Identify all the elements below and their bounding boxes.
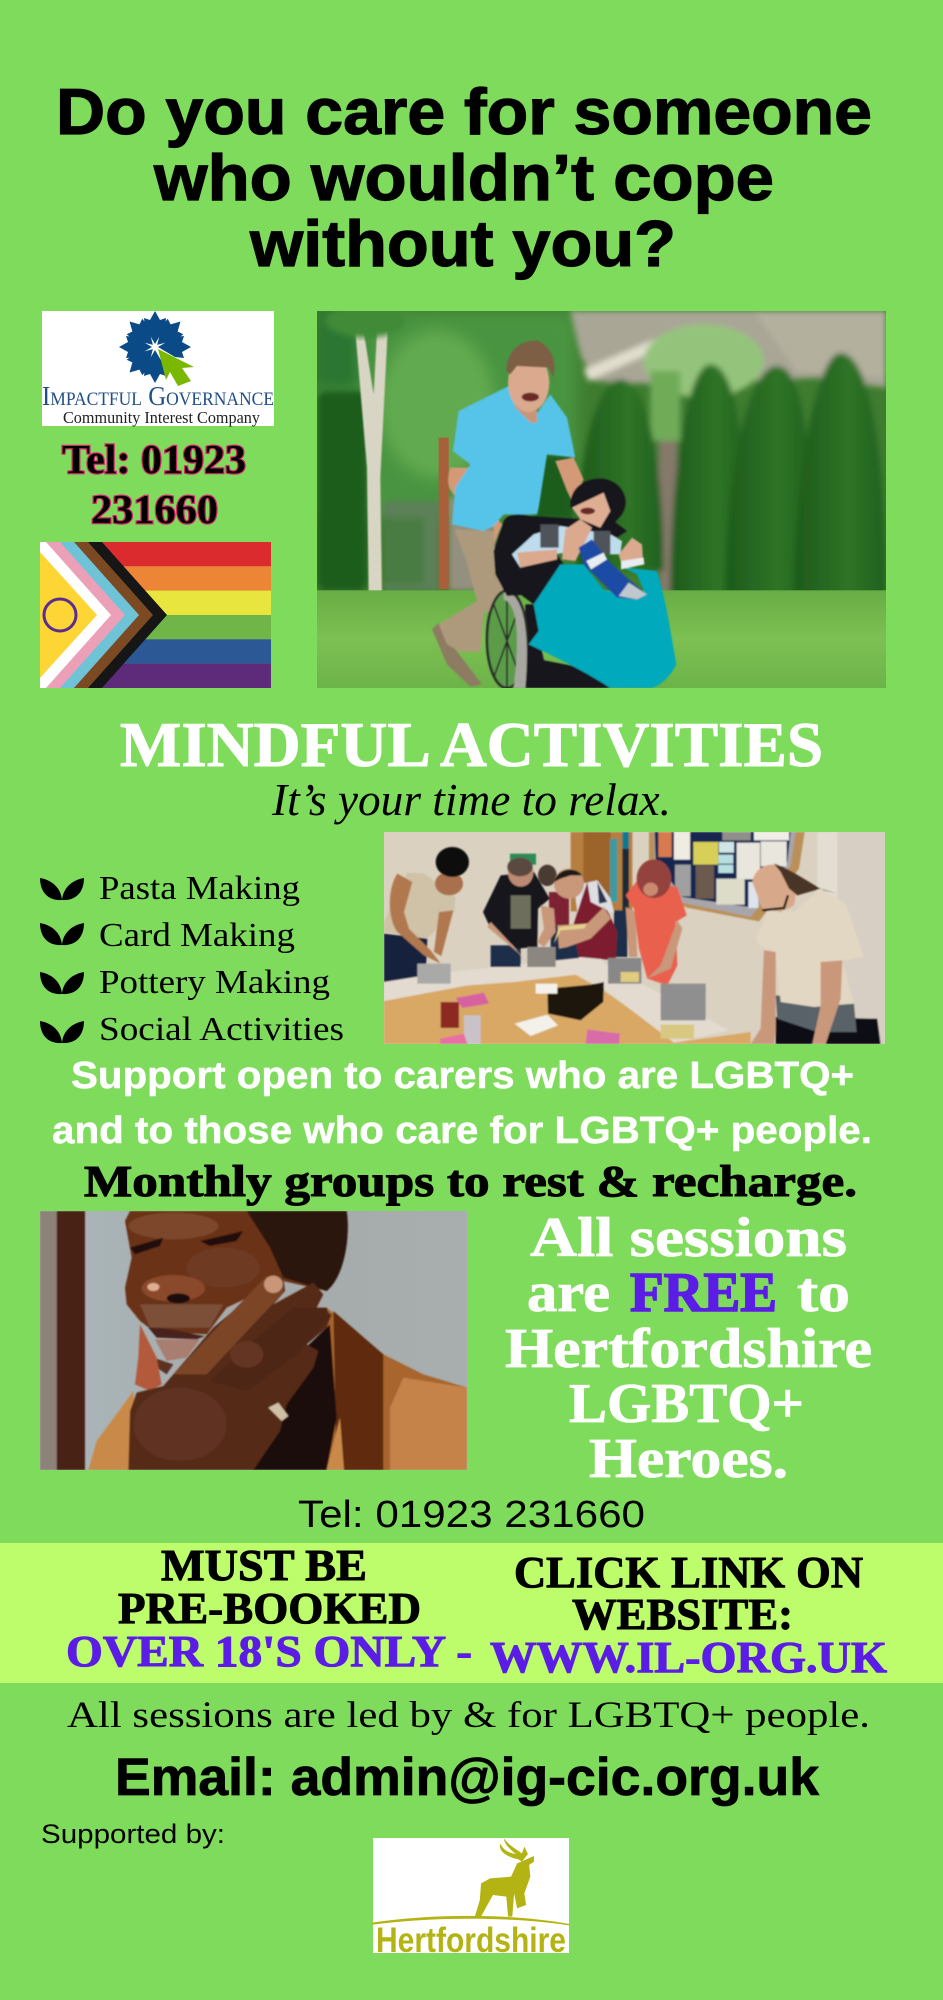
click link on website: WEBSITE: xyxy=(572,1590,793,1639)
table xyxy=(384,975,751,1044)
icon: stag xyxy=(372,1838,569,1925)
person 4 in red dress xyxy=(626,907,637,957)
person 1 xyxy=(384,934,427,982)
title: who wouldn’t cope xyxy=(153,141,774,214)
must be pre-booked: MUST BE xyxy=(161,1541,367,1590)
photo: group making pasta xyxy=(384,832,885,1044)
socks xyxy=(579,539,647,599)
free sessions statement: LGBTQ+ xyxy=(569,1373,804,1435)
email address: Email: admin@ig-cic.org.uk xyxy=(115,1748,820,1807)
free sessions statement: Heroes. xyxy=(589,1428,788,1490)
child xyxy=(512,526,622,568)
item: pottery making: Pottery Making xyxy=(99,964,330,1001)
must be pre-booked: PRE-BOOKED xyxy=(118,1584,421,1633)
are free to: to xyxy=(797,1262,850,1324)
are free to: FREE xyxy=(630,1262,777,1324)
booking band xyxy=(0,1541,943,1683)
must be pre-booked xyxy=(118,1541,421,1633)
person 2 xyxy=(491,945,521,967)
wheelchair xyxy=(530,658,617,688)
man xyxy=(432,623,482,687)
supported by label: Supported by: xyxy=(41,1819,225,1849)
flag: intersex-inclusive progress pride xyxy=(40,542,271,688)
over 18s only: OVER 18'S ONLY - xyxy=(66,1627,472,1676)
photo: man with closed eyes resting face on hand xyxy=(40,1211,467,1470)
activities list xyxy=(40,870,344,1048)
jacket xyxy=(88,1391,140,1470)
icon: green arrow xyxy=(158,349,194,386)
telephone line: Tel: 01923 231660 xyxy=(298,1494,645,1536)
are free to xyxy=(527,1262,850,1324)
objects on table xyxy=(608,958,641,984)
telephone number: Tel: 01923 xyxy=(62,436,246,482)
person 5 in cream t-shirt xyxy=(776,1017,881,1044)
click link on website: CLICK LINK ON xyxy=(514,1548,863,1597)
click link on website xyxy=(514,1548,863,1639)
logo: Impactful Governance xyxy=(42,311,274,427)
icon: blue snowflake star xyxy=(119,311,191,383)
head xyxy=(125,1211,348,1334)
photo: carer pushing child in wheelchair xyxy=(317,304,886,688)
blanket xyxy=(529,564,676,688)
hand xyxy=(128,1276,332,1470)
logo subtitle: Community Interest Company xyxy=(63,408,260,427)
item: pasta making: Pasta Making xyxy=(99,870,300,907)
title xyxy=(56,75,872,280)
website address: WWW.IL-ORG.UK xyxy=(490,1633,887,1682)
monthly groups line: Monthly groups to rest & recharge. xyxy=(84,1157,857,1206)
title: Do you care for someone xyxy=(56,75,872,148)
telephone number: 231660 xyxy=(91,486,218,532)
free sessions statement: All sessions xyxy=(530,1207,847,1269)
support statement: Support open to carers who are LGBTQ+ xyxy=(71,1055,854,1097)
logo: Hertfordshire xyxy=(372,1838,569,1960)
telephone number xyxy=(62,436,246,532)
tagline: It’s your time to relax. xyxy=(271,774,671,825)
person 3 with apron xyxy=(574,880,614,912)
support statement: and to those who care for LGBTQ+ people. xyxy=(52,1110,872,1152)
are free to: are xyxy=(527,1262,610,1324)
section heading: mindful activities: MINDFUL ACTIVITIES xyxy=(120,709,823,780)
free sessions statement: Hertfordshire xyxy=(505,1318,872,1380)
item: social activities: Social Activities xyxy=(99,1011,344,1048)
free sessions statement xyxy=(505,1207,872,1490)
logo wordmark: Impactful Governance xyxy=(42,381,274,411)
title: without you? xyxy=(249,207,676,280)
logo wordmark: Hertfordshire xyxy=(376,1921,566,1960)
item: card making: Card Making xyxy=(99,917,295,954)
led by statement: All sessions are led by & for LGBTQ+ people. xyxy=(67,1695,870,1736)
support statement xyxy=(52,1055,872,1152)
person in background xyxy=(538,865,557,886)
